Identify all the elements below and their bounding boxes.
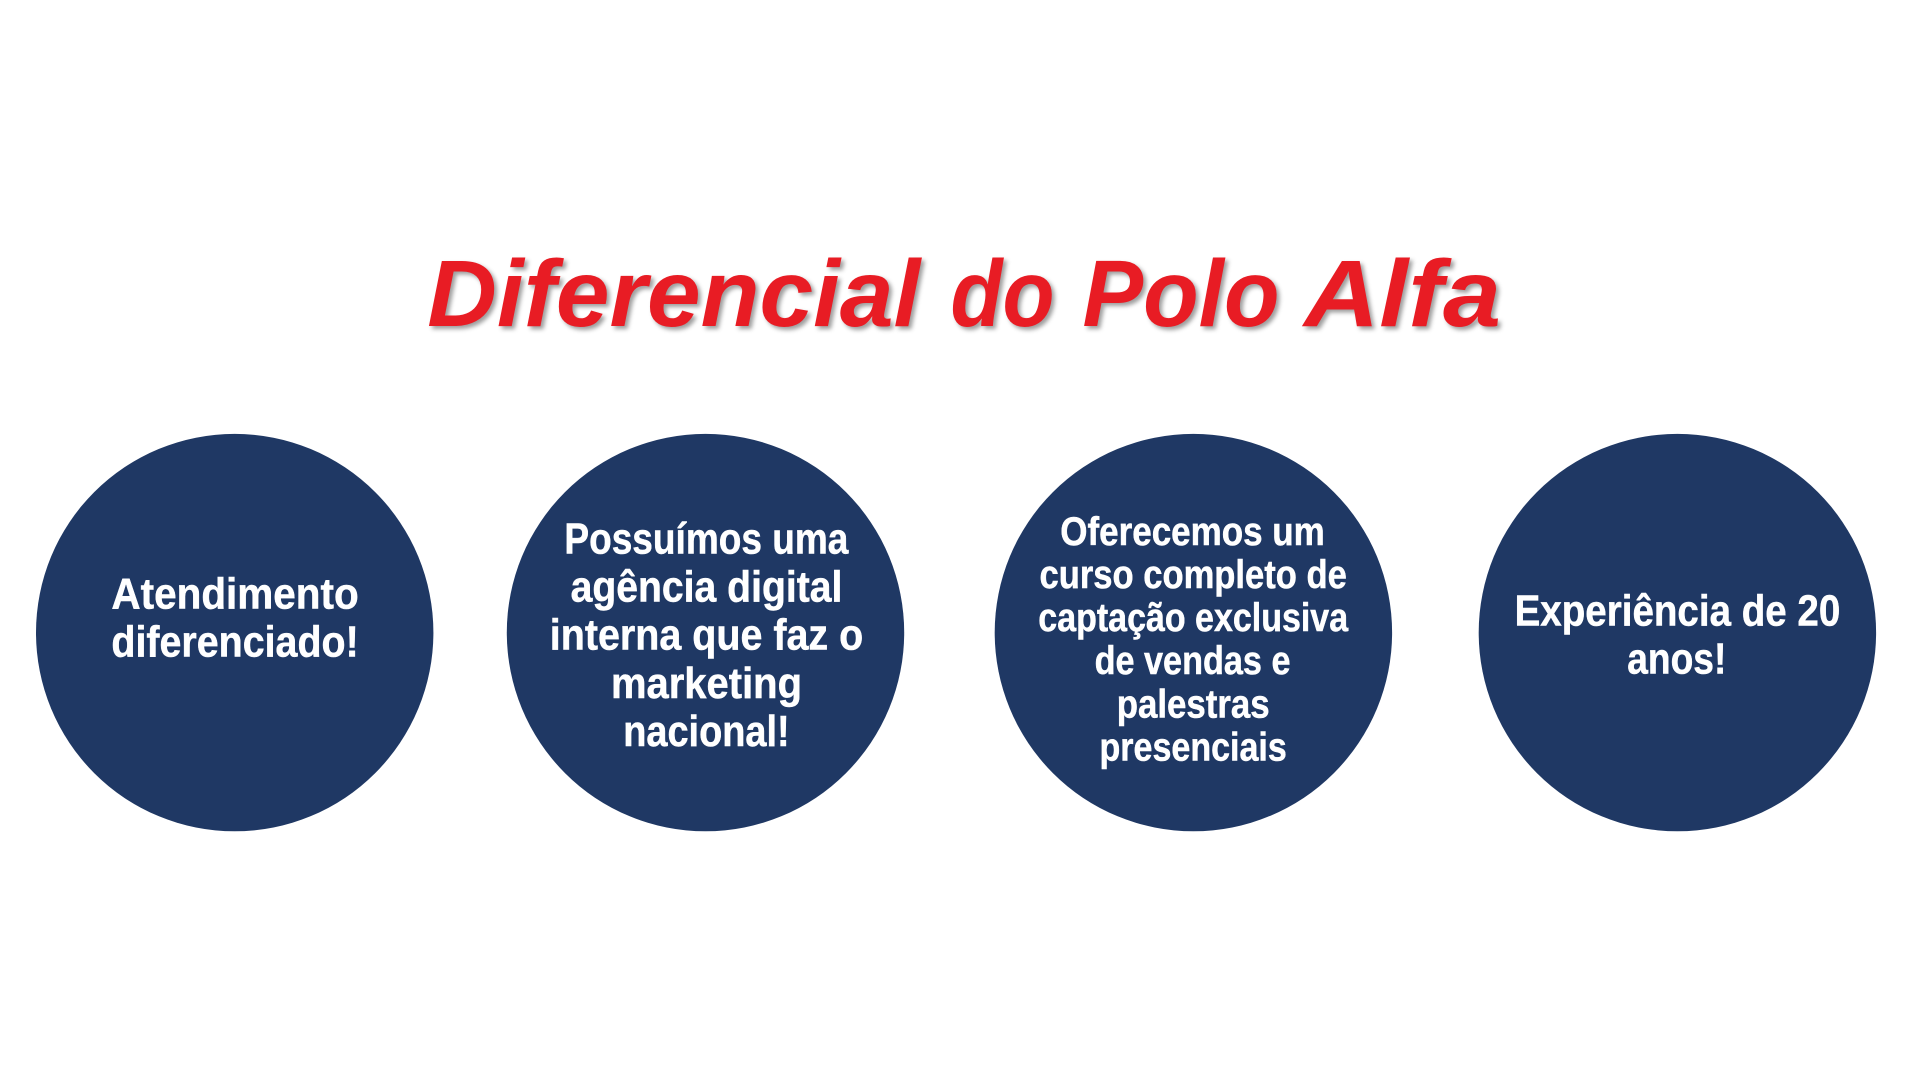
circle 2 text: interna que faz o [550,611,863,660]
circle 1 text [111,570,359,666]
circle 1 text: Atendimento [111,570,359,618]
circle 1 text: diferenciado! [111,617,359,666]
circle 2 text: nacional! [623,707,790,756]
circle 3 text: captação exclusiva [1038,596,1349,640]
circle 4 background [1479,434,1876,831]
panel: experiência de 20 anos [1479,434,1876,831]
circle 2 text: Possuímos uma [564,514,849,563]
circle 2 text [550,514,863,756]
circle 3 text: curso completo de [1040,553,1347,597]
title: Polo [1082,241,1280,347]
circle 4 text: anos! [1627,634,1726,684]
title: Diferencial [427,241,923,347]
circle 3 text [1038,510,1349,769]
circle 3 text: de vendas e [1095,639,1290,683]
title: Alfa [1302,241,1501,347]
circle 3 text: Oferecemos um [1060,510,1325,554]
title [427,241,1501,347]
panel: agência digital interna [507,434,904,831]
circle 1 background [36,434,433,831]
circle 3 text: presenciais [1100,725,1287,769]
title: do [950,241,1054,347]
circle 3 text: palestras [1117,682,1270,726]
panel: curso de captação [995,434,1392,831]
circle 4 text [1515,587,1840,684]
circle 4 text: Experiência de 20 [1515,587,1840,636]
circle 2 text: agência digital [571,562,842,611]
panel: atendimento diferenciado [36,434,433,831]
circle 2 text: marketing [611,659,802,708]
circle 3 background [995,434,1392,831]
circle 2 background [507,434,904,831]
